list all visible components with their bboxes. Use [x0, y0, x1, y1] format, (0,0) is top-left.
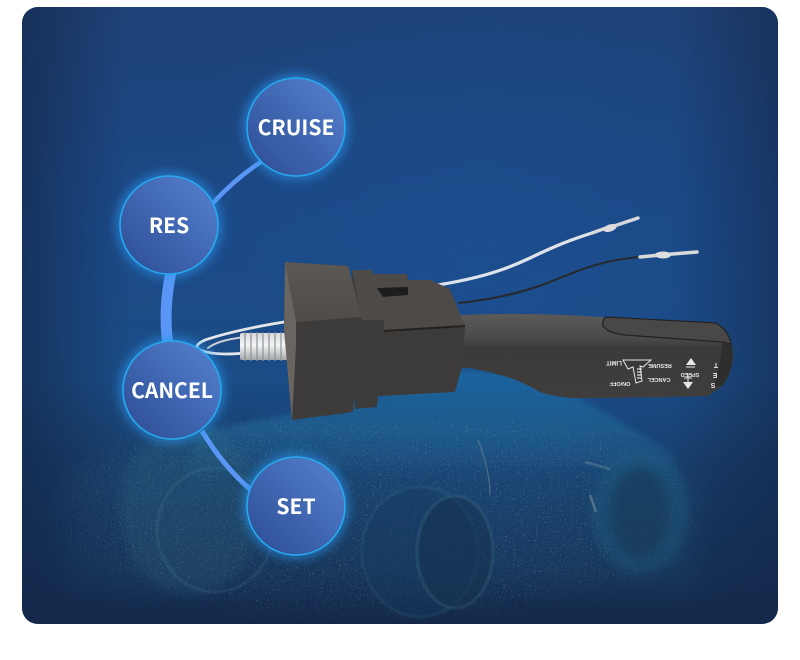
lever markings: RESUME — [648, 362, 672, 368]
lever top button — [603, 317, 731, 344]
node: RES — [116, 172, 222, 278]
lever markings: SPEED — [681, 371, 699, 377]
lever markings: CANCEL — [647, 376, 670, 382]
product: cruise control stalk — [197, 218, 733, 420]
threaded bolt — [240, 332, 296, 361]
connector body — [352, 270, 465, 409]
ghost car illustration — [52, 370, 704, 622]
lever end cap — [713, 343, 733, 387]
wire: black with terminal — [458, 252, 697, 303]
node: SET — [243, 453, 349, 559]
node: CANCEL — [119, 337, 225, 443]
node: SET: SET — [276, 491, 316, 521]
lever markings: E — [712, 371, 717, 378]
node: CRUISE — [243, 74, 349, 180]
connector arcs — [166, 162, 261, 490]
lever markings: S — [710, 381, 715, 388]
lever markings — [606, 358, 718, 389]
lever markings: T — [713, 361, 718, 368]
node: RES: RES — [149, 210, 189, 240]
white wire at rear — [197, 322, 284, 354]
front plate — [284, 262, 362, 420]
lever markings: ON/OFF — [609, 380, 630, 386]
node: CRUISE: CRUISE — [258, 112, 334, 142]
lever body — [460, 314, 733, 398]
node: CANCEL: CANCEL — [131, 375, 213, 405]
wire: white with terminal — [438, 218, 638, 285]
lever markings: LIMIT — [606, 359, 622, 365]
